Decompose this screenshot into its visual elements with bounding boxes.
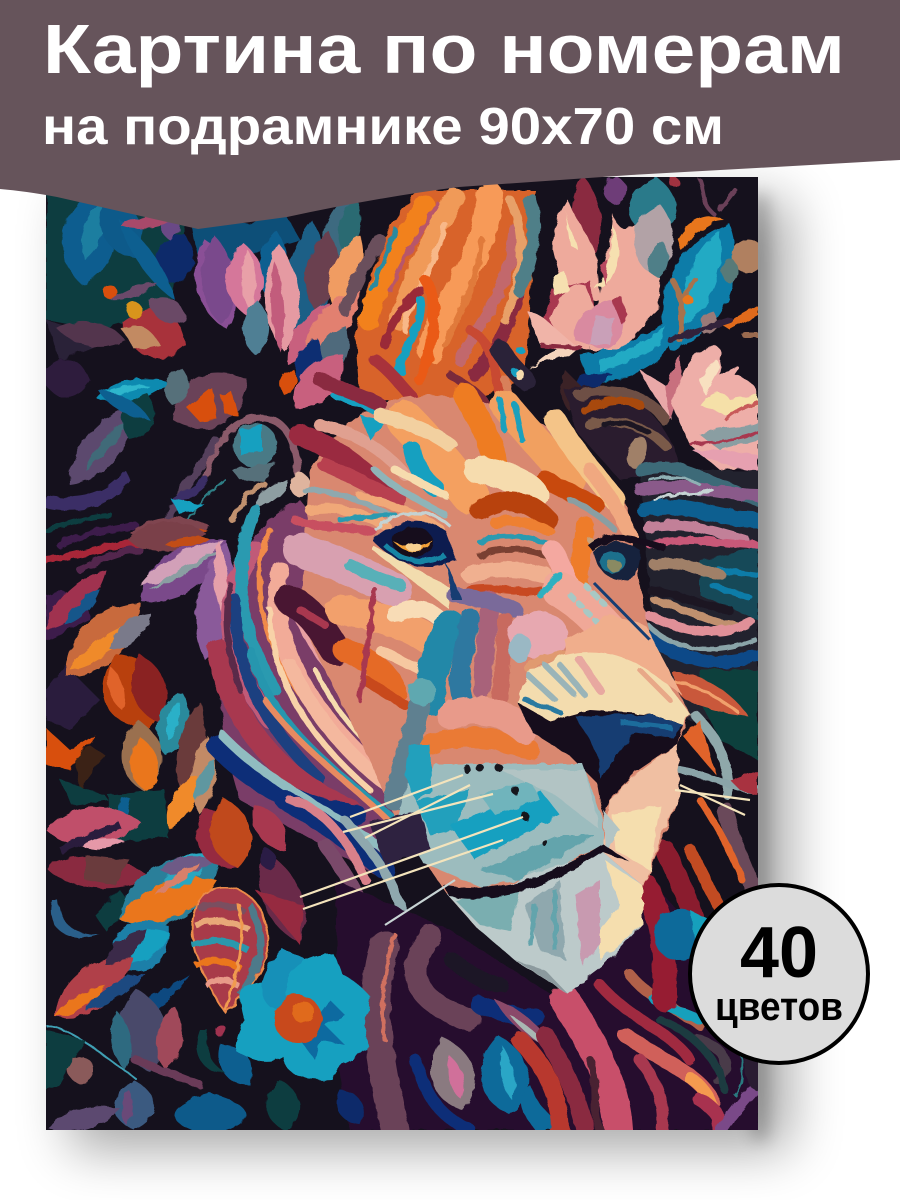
badge: 40 colours: цветов	[715, 985, 843, 1029]
cheek and nose bridge	[290, 548, 575, 800]
muzzle pink shading	[565, 615, 682, 695]
red and maroon leaves under mane	[195, 797, 307, 945]
lion face base	[300, 395, 690, 993]
muzzle fur flecks	[525, 660, 670, 712]
top orange mane	[345, 190, 535, 425]
chin white fur	[447, 852, 643, 993]
purple and grey mane plumes beside arch	[128, 528, 234, 660]
lower mane maroon and purple	[335, 800, 758, 1130]
dark behind whiskers	[370, 810, 430, 865]
right pink flower	[640, 345, 758, 490]
mouth line	[443, 844, 630, 899]
blue leaf beneath pink flower	[562, 318, 670, 410]
small left streaks and dark leaves	[38, 514, 211, 730]
vine arch and inner leaves	[164, 414, 310, 523]
orange leaves left	[46, 586, 221, 833]
canvas edge shadow	[752, 195, 768, 1140]
dark green shrubs	[60, 780, 168, 842]
canvas drop shadow	[70, 200, 790, 1150]
title: Картина по номерам	[43, 10, 845, 88]
lower muzzle blue	[397, 745, 603, 888]
head right edge	[593, 582, 650, 640]
forehead strokes	[360, 395, 630, 650]
background dark green and blue foliage top left	[46, 186, 300, 360]
header banner	[0, 0, 900, 229]
blue and red leaf lower left	[54, 920, 190, 1019]
right mane streaks	[640, 467, 758, 795]
left mane with pink and blue streaks	[217, 500, 430, 960]
badge: 40 colours	[690, 885, 868, 1063]
lower left foliage	[45, 984, 385, 1138]
striped red and teal leaf	[192, 888, 268, 1012]
head top fringe: pink, red and cyan	[295, 380, 405, 532]
right eye	[590, 538, 665, 580]
teal leaves upper right and small twigs	[572, 177, 758, 351]
brown mane behind head	[565, 386, 680, 480]
pink flower top	[528, 200, 660, 370]
muzzle top cream	[517, 645, 690, 725]
pink and maroon leaves left edge	[44, 803, 152, 938]
blue flower	[236, 948, 370, 1124]
top left leaf cluster	[39, 189, 373, 511]
right lip cream	[603, 744, 680, 886]
subtitle: на подрамнике 90х70 см	[42, 98, 724, 156]
painting: floral lion portrait	[38, 174, 764, 1138]
large orange and teal leaf	[119, 853, 219, 926]
whiskers	[300, 775, 750, 925]
nose	[517, 702, 683, 817]
badge: 40 colours: 40	[740, 913, 818, 993]
left eye	[372, 513, 462, 600]
